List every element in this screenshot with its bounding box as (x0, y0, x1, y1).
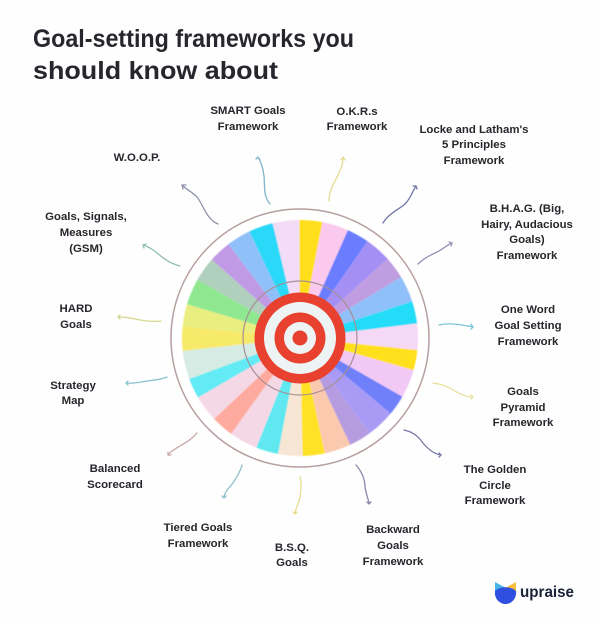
label: SMART Goals Framework: Framework (218, 121, 279, 133)
arrow: Tiered Goals (222, 465, 242, 498)
arrow: Backward Goals (356, 465, 371, 504)
outer ring (171, 209, 429, 467)
label: Strategy Map: Map (62, 395, 84, 407)
bullseye (254, 292, 346, 384)
target wheel (171, 209, 429, 467)
label: The Golden Circle: Framework (465, 495, 526, 507)
label: Balanced Scorecard: Balanced (90, 463, 140, 475)
label: GSM: (GSM) (69, 243, 103, 255)
arrow: B.H.A.G. (418, 242, 452, 264)
label: The Golden Circle: The Golden (464, 464, 526, 476)
arrow: Goals Pyramid (433, 383, 473, 399)
label: GSM: Measures (60, 227, 112, 239)
arrow: SMART Goals (256, 157, 270, 204)
label: B.H.A.G.: Goals) (509, 234, 545, 246)
arrow: One Word (439, 324, 473, 329)
icon: logo mark (495, 582, 516, 604)
label: Locke and Latham's: 5 Principles (442, 139, 506, 151)
label: Backward Goals: Goals (377, 540, 409, 552)
label: B.S.Q. Goals: B.S.Q. (275, 542, 309, 554)
label: B.S.Q. Goals: Goals (276, 557, 308, 569)
label: HARD Goals: HARD (60, 303, 92, 315)
arrow: Strategy Map (126, 377, 167, 385)
coloured wedges (241, 279, 359, 397)
label: B.H.A.G.: B.H.A.G. (Big, (490, 203, 564, 215)
label: The Golden Circle: Circle (479, 480, 511, 492)
label: B.H.A.G.: Framework (497, 250, 558, 262)
label: SMART Goals Framework: SMART Goals (210, 105, 286, 117)
label: Strategy Map: Strategy (50, 380, 96, 392)
arrow: O.K.R.s (329, 157, 345, 201)
arrow: Locke and Latham (383, 186, 417, 223)
arrow: B.S.Q. Goals (293, 477, 301, 514)
label: Locke and Latham's: Framework (444, 155, 505, 167)
label: Goals Pyramid: Framework (493, 417, 554, 429)
label: HARD Goals: Goals (60, 319, 92, 331)
label: One Word: Goal Setting (494, 320, 562, 332)
logo: upraise (495, 582, 574, 604)
label: One Word: Framework (498, 336, 559, 348)
label: W.O.O.P.: W.O.O.P. (114, 152, 160, 164)
label: B.H.A.G.: Hairy, Audacious (481, 219, 573, 231)
arrow: HARD Goals (118, 315, 161, 321)
title: should know about (33, 57, 279, 85)
label: Backward Goals: Framework (363, 556, 424, 568)
wordmark: upraise (520, 584, 574, 601)
label: Tiered Goals: Framework (168, 538, 229, 550)
label: O.K.R.s Framework: O.K.R.s (336, 106, 378, 118)
label: Goals Pyramid: Pyramid (501, 402, 546, 414)
title: Goal-setting frameworks you (33, 25, 354, 53)
label: O.K.R.s Framework: Framework (327, 121, 388, 133)
arrow: The Golden Circle (404, 430, 441, 457)
arrow: W.O.O.P. (182, 185, 218, 224)
title (33, 25, 354, 85)
label: Balanced Scorecard: Scorecard (87, 479, 143, 491)
label: Locke and Latham's: Locke and Latham's (419, 124, 529, 136)
thin inner ring (243, 281, 357, 395)
label: Tiered Goals: Tiered Goals (164, 522, 232, 534)
arrow: GSM (143, 244, 180, 266)
arrow: Balanced Scorecard (168, 433, 197, 455)
label: Backward Goals: Backward (366, 524, 420, 536)
label: GSM: Goals, Signals, (45, 211, 127, 223)
label: One Word: One Word (501, 304, 555, 316)
label: Goals Pyramid: Goals (507, 386, 539, 398)
